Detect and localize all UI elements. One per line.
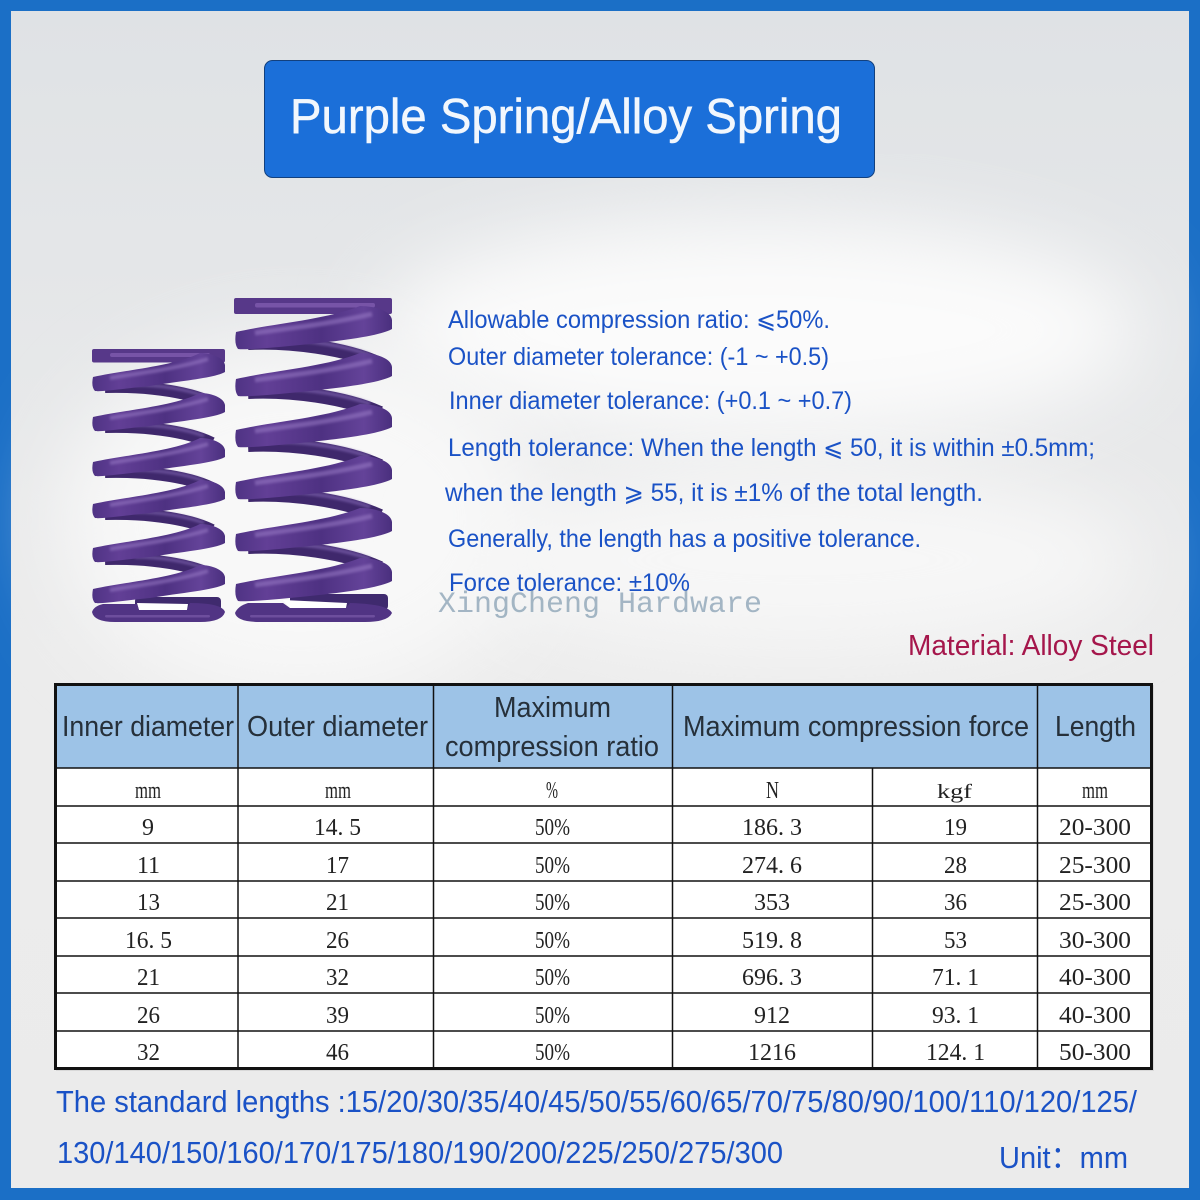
table units row: % (546, 778, 558, 804)
table data rows: 1216 (748, 1040, 796, 1066)
table data rows: 50% (535, 815, 570, 841)
standard lengths note: 130/140/150/160/170/175/180/190/200/225/250/275/300 (57, 1135, 783, 1170)
standard lengths note: The standard lengths :15/20/30/35/40/45/50/55/60/65/70/75/80/90/100/110/120/125/ (56, 1084, 1137, 1119)
table data rows: 40-300 (1059, 1003, 1131, 1029)
table data rows: 274. 6 (742, 853, 802, 879)
specification text block: Allowable compression ratio: ⩽50%. (448, 306, 830, 334)
table data rows: 25-300 (1059, 853, 1131, 879)
table units row: mm (135, 778, 161, 804)
table data rows: 26 (137, 1003, 160, 1029)
table data rows: 696. 3 (742, 965, 802, 991)
table data rows: 13 (137, 890, 160, 916)
table data rows: 39 (326, 1003, 349, 1029)
table units row: mm (325, 778, 351, 804)
table data rows: 50-300 (1059, 1040, 1131, 1066)
table data rows: 11 (137, 853, 160, 879)
table header row: Inner diameter (62, 711, 234, 743)
table units row: N (766, 778, 779, 804)
icon: tall purple spring (234, 298, 392, 622)
table data rows: 71. 1 (932, 965, 979, 991)
table data rows (125, 815, 1131, 1066)
table data rows: 40-300 (1059, 965, 1131, 991)
table data rows: 16. 5 (125, 928, 172, 954)
table data rows: 186. 3 (742, 815, 802, 841)
table data rows: 21 (326, 890, 349, 916)
table data rows: 46 (326, 1040, 349, 1066)
table data rows: 26 (326, 928, 349, 954)
table header row: Maximum (494, 692, 611, 724)
table data rows: 32 (326, 965, 349, 991)
table data rows: 9 (142, 815, 154, 841)
table data rows: 53 (944, 928, 967, 954)
specification text block: Outer diameter tolerance: (-1 ~ +0.5) (448, 343, 829, 371)
watermark: XingCheng Hardware (438, 588, 762, 622)
table header row: Maximum compression force (683, 711, 1029, 743)
specification text block: Generally, the length has a positive tolerance. (448, 525, 921, 553)
table units row (135, 778, 1108, 804)
specification table (56, 684, 1154, 1071)
table header row: compression ratio (445, 731, 659, 763)
specification text block: Inner diameter tolerance: (+0.1 ~ +0.7) (449, 387, 852, 415)
table data rows: 124. 1 (926, 1040, 985, 1066)
table data rows: 50% (535, 1003, 570, 1029)
specification text block: Length tolerance: When the length ⩽ 50, it is within ±0.5mm; (448, 434, 1095, 462)
unit label: Unit：mm (999, 1140, 1128, 1175)
material label: Material: Alloy Steel (908, 630, 1154, 662)
table data rows: 353 (754, 890, 790, 916)
icon: short purple spring (92, 349, 225, 622)
table units row: mm (1082, 778, 1108, 804)
table data rows: 50% (535, 965, 570, 991)
table data rows: 25-300 (1059, 890, 1131, 916)
table data rows: 21 (137, 965, 160, 991)
table data rows: 19 (944, 815, 967, 841)
title banner: Purple Spring/Alloy Spring (290, 90, 842, 144)
table data rows: 519. 8 (742, 928, 802, 954)
table data rows: 20-300 (1059, 815, 1131, 841)
table data rows: 50% (535, 890, 570, 916)
table data rows: 912 (754, 1003, 790, 1029)
table data rows: 32 (137, 1040, 160, 1066)
standard lengths note (56, 1084, 1137, 1170)
table data rows: 28 (944, 853, 967, 879)
table units row: kgf (937, 781, 972, 803)
table data rows: 14. 5 (314, 815, 361, 841)
table data rows: 50% (535, 928, 570, 954)
specification text block: when the length ⩾ 55, it is ±1% of the total length. (444, 479, 983, 507)
table data rows: 30-300 (1059, 928, 1131, 954)
table header row: Length (1055, 711, 1136, 743)
table data rows: 50% (535, 1040, 570, 1066)
table data rows: 50% (535, 853, 570, 879)
table data rows: 17 (326, 853, 349, 879)
specification text block (444, 306, 1095, 597)
table data rows: 36 (944, 890, 967, 916)
table header row (62, 692, 1136, 763)
specification text block: Force tolerance: ±10% (449, 569, 690, 597)
title banner (264, 60, 874, 178)
table data rows: 93. 1 (932, 1003, 979, 1029)
table header row: Outer diameter (247, 711, 428, 743)
